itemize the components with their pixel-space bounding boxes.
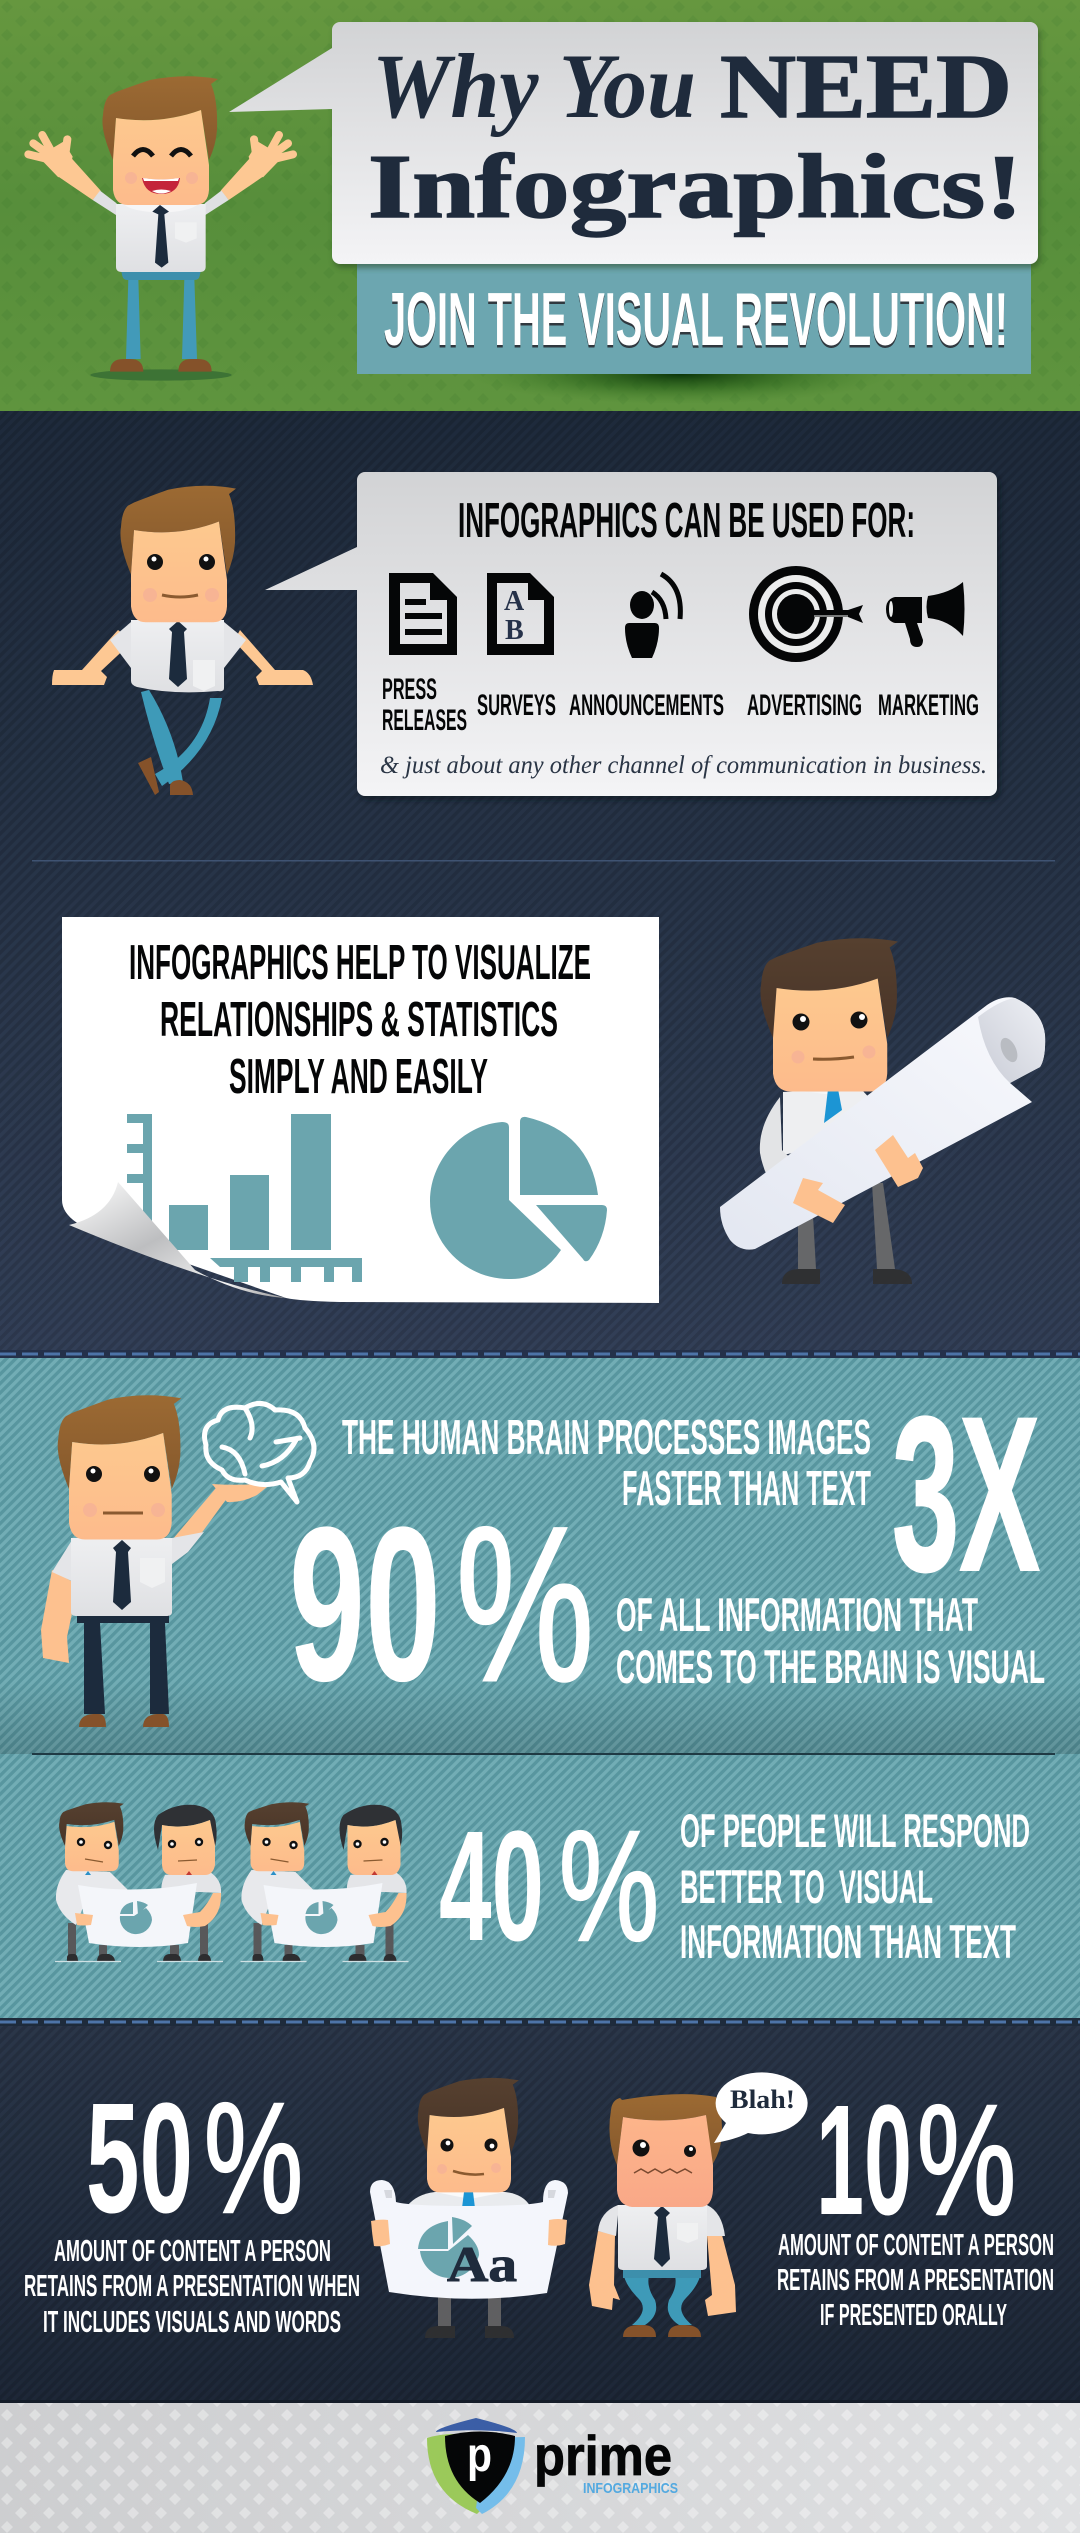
stat: 10 percent: 10	[816, 2073, 912, 2248]
stat: 90 percent visual: 90	[289, 1481, 441, 1727]
icon: survey document	[487, 573, 554, 655]
pie chart	[430, 1117, 607, 1279]
cheering man	[28, 76, 293, 381]
paper heading: RELATIONSHIPS & STATISTICS	[160, 993, 558, 1047]
icon: brain outline	[204, 1403, 314, 1502]
man holding scroll	[720, 938, 1045, 1284]
section: dark uses and visualize	[0, 411, 1080, 1353]
stat: 10 percent: %	[917, 2073, 1016, 2248]
use labels: RELEASES	[382, 704, 467, 737]
logo: prime infographics shield	[427, 2418, 678, 2514]
stat: 50 percent: %	[204, 2071, 303, 2246]
sign pie	[418, 2217, 479, 2278]
use labels: MARKETING	[878, 689, 979, 722]
use labels: ADVERTISING	[747, 689, 862, 722]
bar chart	[127, 1114, 362, 1282]
stat: 10 percent	[777, 2073, 1054, 2332]
stat: 40 percent respond: 40	[439, 1799, 544, 1974]
icon: survey document: B	[505, 615, 524, 646]
stat: 40 percent respond: %	[559, 1799, 659, 1974]
title speech bubble	[229, 22, 1040, 268]
sign text: Aa	[447, 2236, 517, 2292]
panel: uses speech bubble	[265, 472, 1000, 800]
title line 1	[372, 35, 1012, 137]
logo: prime infographics shield: p	[467, 2429, 492, 2482]
title line 2: Infographics!	[368, 136, 1023, 237]
logo: prime infographics shield: prime	[534, 2424, 672, 2487]
use labels: SURVEYS	[477, 689, 556, 722]
stat: 50 percent: IT INCLUDES VISUALS AND WORDS	[43, 2304, 341, 2339]
page curl	[69, 1182, 286, 1298]
dark shadow under ribbon	[470, 344, 890, 404]
lower dark background	[0, 2020, 1080, 2402]
panel: curled paper with charts	[62, 917, 659, 1303]
title line 1: NEED	[720, 36, 1012, 137]
dark background	[0, 411, 1080, 1353]
use labels: ANNOUNCEMENTS	[569, 689, 724, 722]
title line 1: Why You	[372, 35, 696, 137]
ribbon: join the visual revolution	[357, 264, 1031, 374]
section: teal statistics	[0, 1358, 1080, 2020]
man holding Aa sign	[370, 2078, 568, 2338]
worried man	[589, 2094, 736, 2337]
stat: 50 percent	[24, 2071, 360, 2339]
paper heading: INFOGRAPHICS HELP TO VISUALIZE	[129, 936, 591, 990]
section: retention statistics	[0, 2018, 1080, 2402]
use labels: PRESS	[382, 673, 437, 706]
icon: survey document: A	[504, 586, 525, 617]
teal background	[0, 1358, 1080, 2020]
closing script note: & just about any other channel of communication in business.	[380, 752, 987, 779]
icon: press release document	[389, 573, 457, 655]
icon: announcement person	[625, 574, 680, 658]
blah speech bubble: Blah!	[730, 2085, 795, 2114]
icon: megaphone	[886, 582, 964, 647]
leaning man	[52, 486, 313, 795]
stat: 50 percent: RETAINS FROM A PRESENTATION WHEN	[24, 2268, 360, 2303]
stat: 90 percent visual: %	[456, 1481, 594, 1727]
hands	[371, 2219, 567, 2246]
icon: target with arrow	[749, 566, 863, 662]
stat: 40 percent respond	[439, 1799, 1030, 1974]
use labels	[382, 673, 979, 737]
stitched divider	[0, 1350, 1080, 1358]
man holding brain	[41, 1395, 272, 1727]
section: green header	[0, 0, 1080, 411]
paper heading	[129, 936, 591, 1104]
header background	[0, 0, 1080, 411]
stat: 50 percent: 50	[86, 2071, 193, 2246]
stat: brain processes images 3x	[342, 1371, 1040, 1617]
paper heading: SIMPLY AND EASILY	[229, 1050, 488, 1104]
logo: prime infographics shield: INFOGRAPHICS	[583, 2480, 678, 2497]
footer band	[0, 2400, 1080, 2533]
stat: 90 percent visual	[289, 1481, 1045, 1727]
four men holding charts	[55, 1802, 408, 1962]
stat: 50 percent: AMOUNT OF CONTENT A PERSON	[54, 2233, 331, 2268]
blah speech bubble	[714, 2072, 808, 2143]
